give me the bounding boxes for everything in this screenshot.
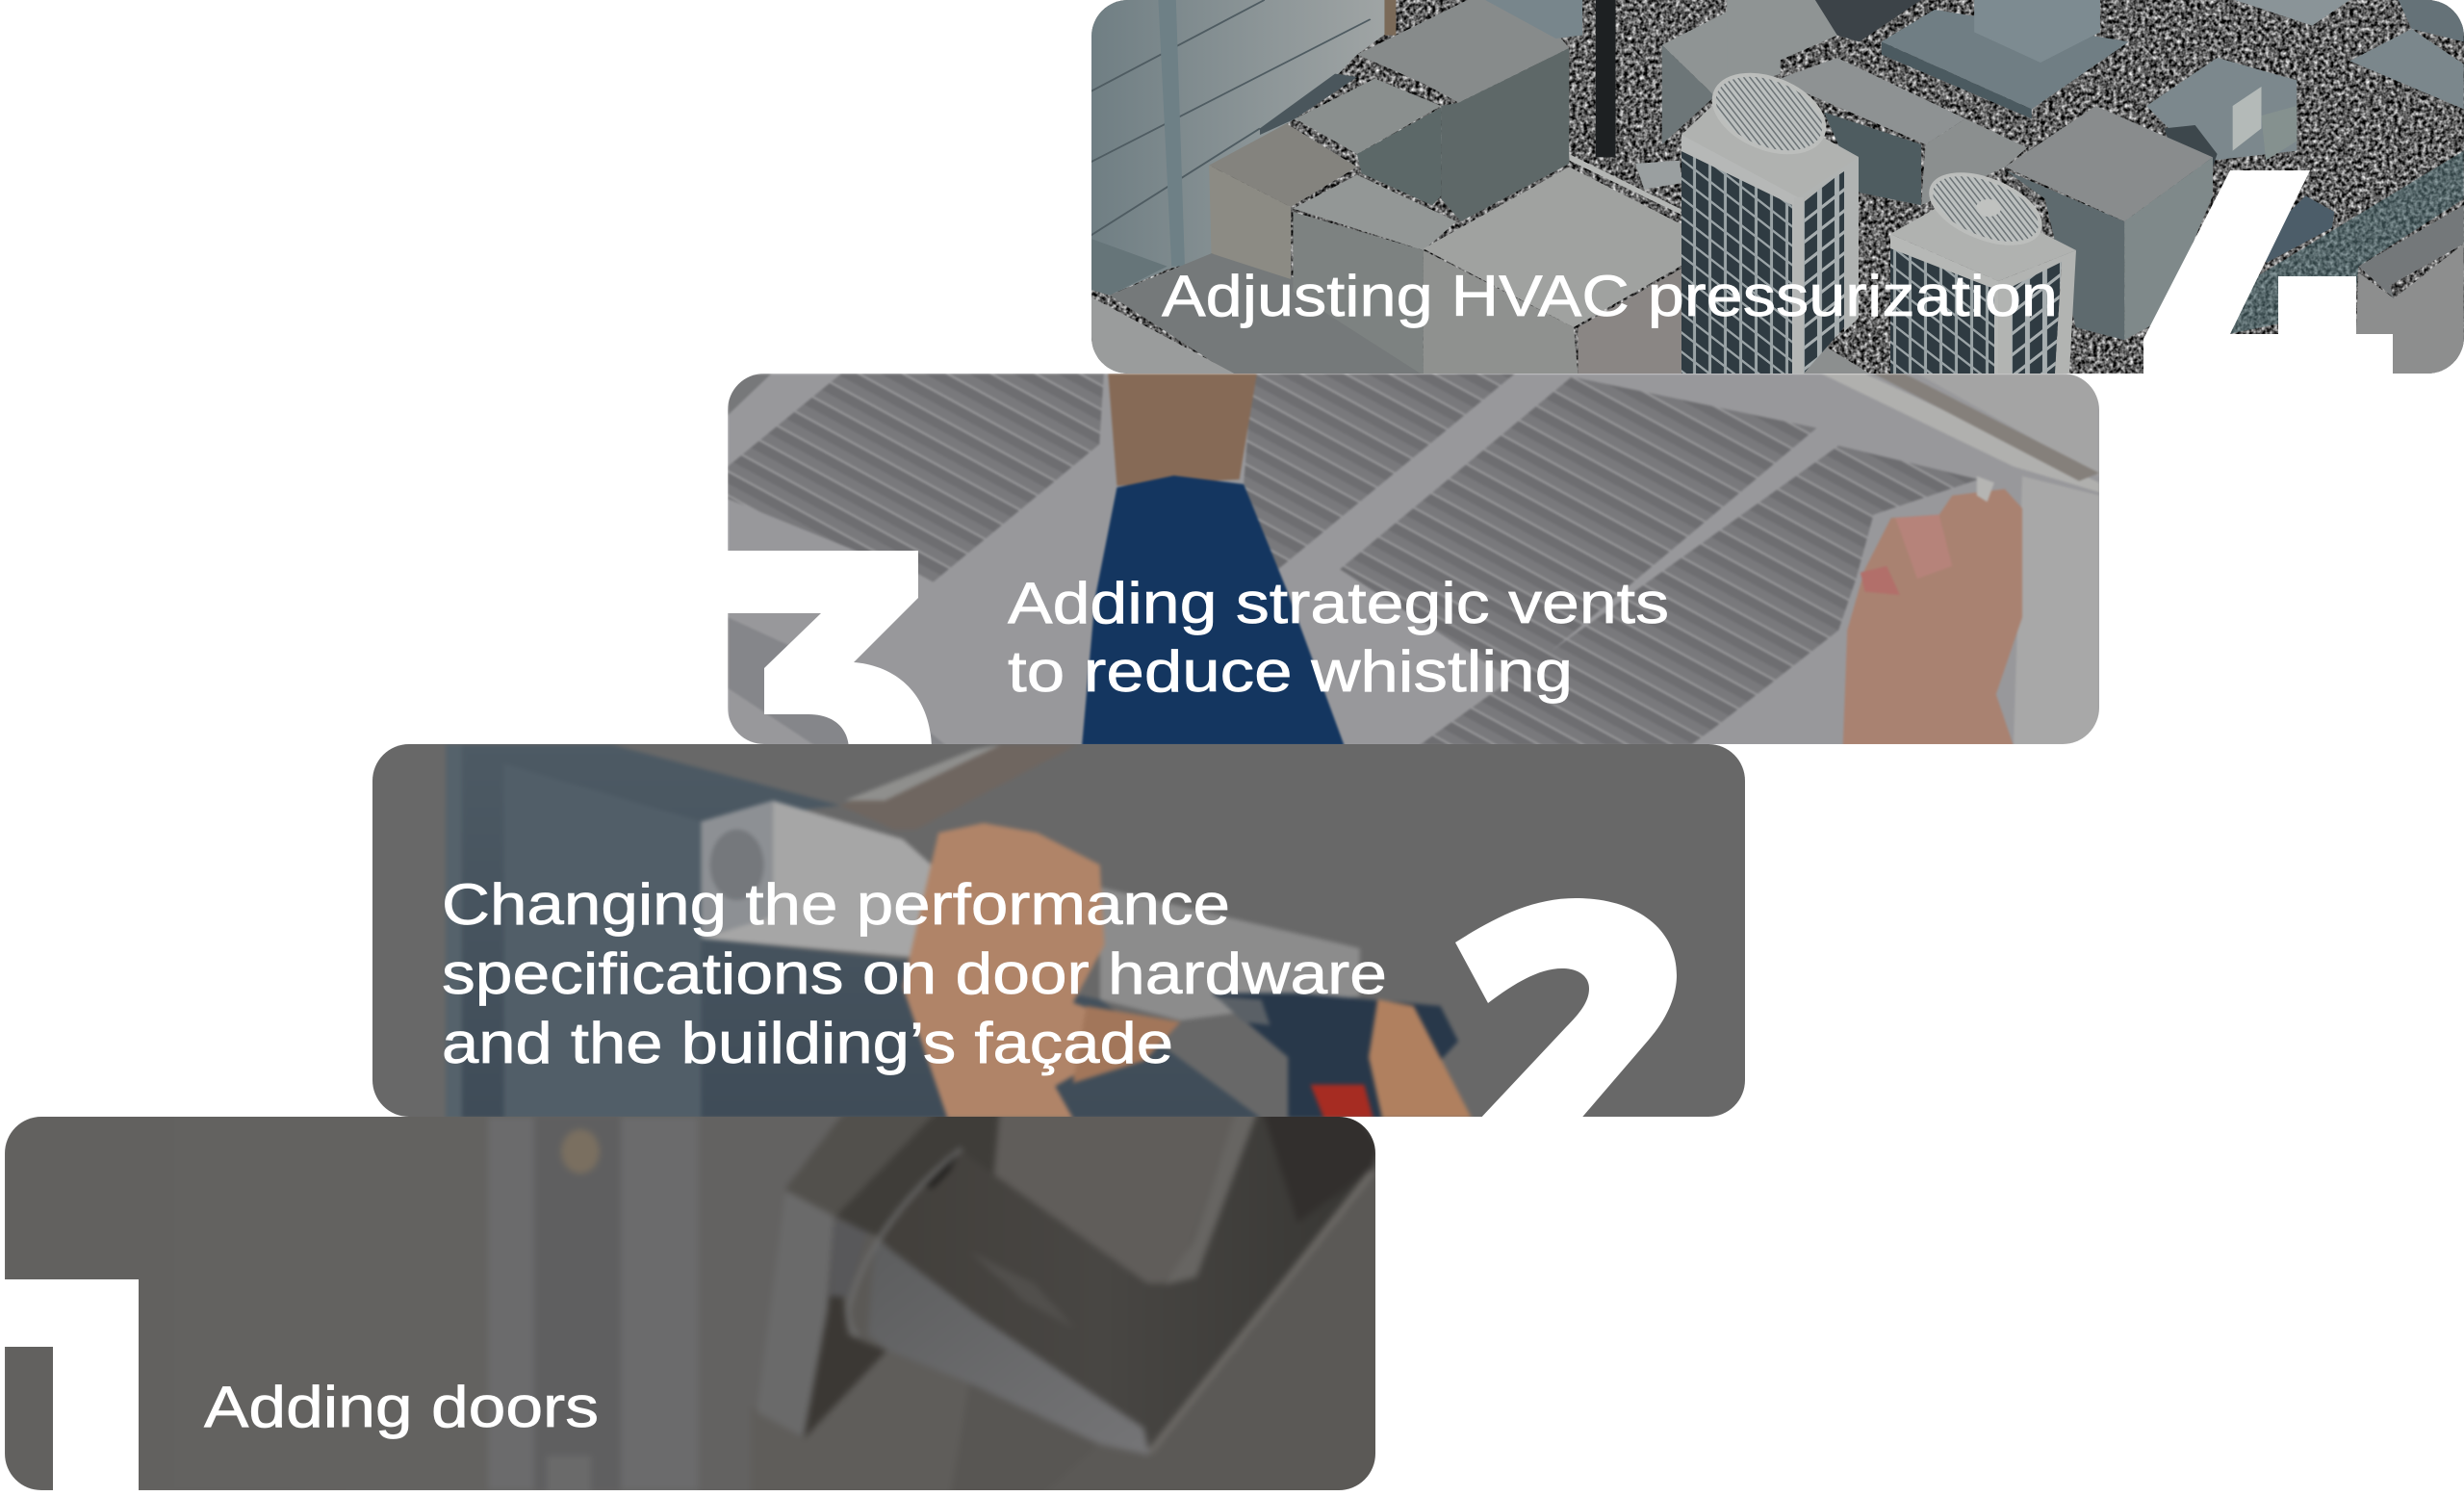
panel: step 4 hvac pressurization [1088,0,2464,377]
text: Changing the performance: and the building’s façade [442,1011,1173,1075]
photo: rooftop hvac units [1088,0,2464,375]
text: Adding strategic vents [1008,571,1669,704]
photo: ceiling vent with hands [728,374,2101,746]
photo: door closer being fitted with drill [356,736,1763,1122]
panel: step 3 strategic vents [722,374,2101,751]
numeral 2 [1455,898,1677,1122]
text: Changing the performance: Changing the performance [442,872,1230,937]
text: Changing the performance: specifications on door hardware [442,941,1387,1006]
text: Adjusting HVAC pressurization: Adjusting HVAC pressurization [1162,264,2058,328]
text: Adding doors: Adding doors [204,1375,599,1439]
text: Adding strategic vents: to reduce whistling [1008,639,1573,704]
photo: door lever handle [0,1107,1399,1496]
text: Adding strategic vents: Adding strategic vents [1008,571,1669,635]
numeral 3 [722,551,932,751]
text: Changing the performance [442,872,1387,1075]
numeral 4 [2143,170,2393,377]
numeral 1 [0,1279,139,1496]
panel: step 2 door hardware [356,736,1763,1122]
panel: step 1 adding doors [0,1107,1399,1496]
